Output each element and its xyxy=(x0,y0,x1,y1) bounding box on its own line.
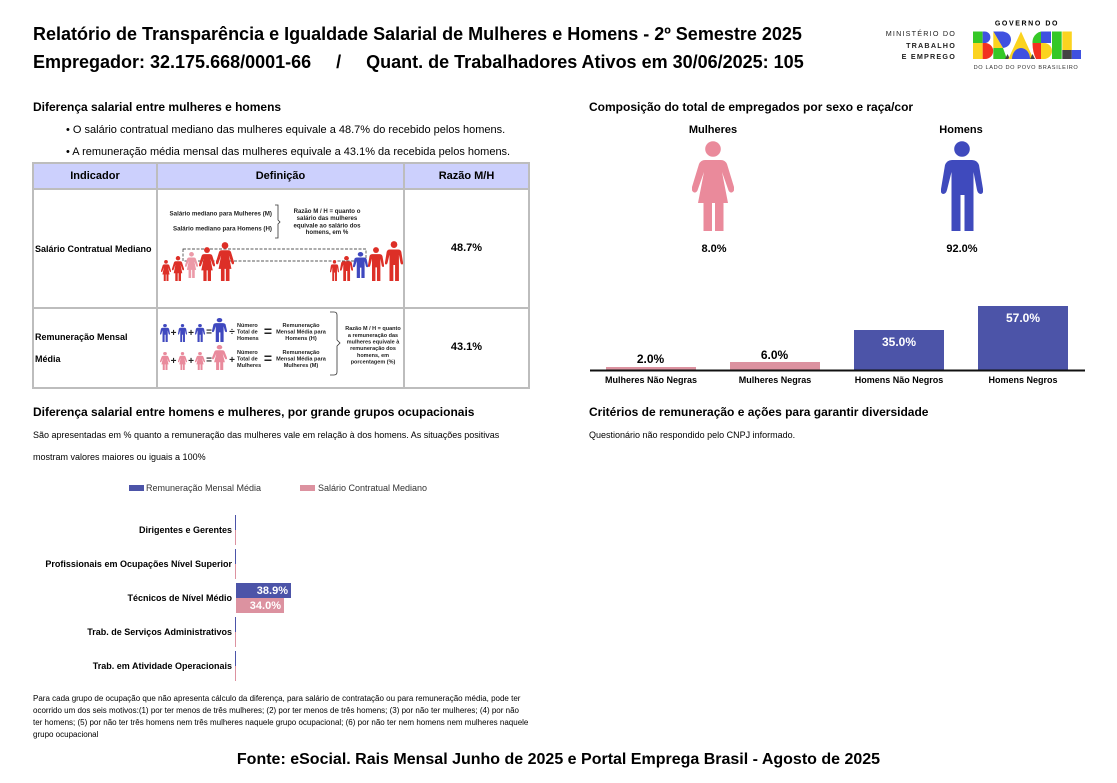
definition diagram: remuneração média xyxy=(160,312,401,376)
bar chart: raça/cor: Homens Negros xyxy=(988,375,1058,385)
definition diagram: remuneração média: + xyxy=(229,355,235,366)
definition diagram: remuneração média: Número xyxy=(237,350,258,356)
definition diagram: remuneração média: Total de xyxy=(237,356,258,362)
bar: 34.0% xyxy=(236,598,284,613)
label: Serviços Administrativos: Trab. de Serviços Administrativos xyxy=(87,627,232,637)
row label: Salário Contratual Mediano: Salário Contratual Mediano xyxy=(35,244,152,254)
definition diagram: remuneração média: Mensal Média para xyxy=(276,330,327,336)
definition diagram: remuneração média: + xyxy=(171,356,177,367)
logo: Ministério do Trabalho e Emprego: TRABALHO xyxy=(906,40,956,50)
definition diagram: salário mediano: Salário mediano para Mulheres (M) xyxy=(170,210,272,218)
definition diagram: salário mediano: salário das mulheres xyxy=(297,215,358,222)
row label: Remuneração Mensal Média: Média xyxy=(35,354,61,364)
label: Profissionais: Profissionais em Ocupações Nível Superior xyxy=(45,559,232,569)
definition diagram: remuneração média: = xyxy=(264,323,272,339)
text: bullet points xyxy=(66,124,510,158)
definition diagram: remuneração média: + xyxy=(188,356,194,367)
value: 8.0%: 8.0% xyxy=(701,243,727,255)
label: Técnicos: Técnicos de Nível Médio xyxy=(127,593,232,603)
logo: Ministério do Trabalho e Emprego: E EMPREGO xyxy=(902,52,956,61)
definition diagram: remuneração média: Homens (H) xyxy=(285,336,317,342)
logo: Governo do Brasil: GOVERNO DO xyxy=(995,20,1059,28)
text: bullet points: • A remuneração média mensal das mulheres equivale a 43.1% da recebida pelos homens. xyxy=(66,146,510,158)
definition diagram: remuneração média: = xyxy=(264,350,272,366)
heading: critérios: Critérios de remuneração e ações para garantir diversidade xyxy=(589,405,928,419)
icon: man xyxy=(941,141,983,231)
bar chart: raça/cor: 6.0% xyxy=(761,348,789,362)
definition diagram: remuneração média: Remuneração xyxy=(282,350,320,356)
legend: Salário Contratual Mediano: Salário Contratual Mediano xyxy=(318,483,427,493)
bar: 38.9% xyxy=(236,583,291,598)
chart: grupos ocupacionais xyxy=(235,515,291,681)
definition diagram: remuneração média: ÷ xyxy=(229,327,235,338)
text: nota: grupo ocupacional xyxy=(33,730,98,739)
bar chart: raça/cor: Mulheres Não Negras xyxy=(605,375,697,385)
table borders xyxy=(32,162,530,389)
heading: grupos ocupacionais: Diferença salarial entre homens e mulheres, por grande grupos ocupacionais xyxy=(33,405,474,419)
definition diagram: remuneração média: remuneração dos xyxy=(350,346,396,352)
definition diagram: remuneração média: Mensal Média para xyxy=(276,356,327,362)
text: explicação: mostram valores maiores ou iguais a 100% xyxy=(33,452,206,462)
table header background xyxy=(33,163,529,189)
definition diagram: salário mediano: Razão M / H = quanto o xyxy=(294,208,361,215)
bar chart: raça/cor: 57.0% xyxy=(1006,311,1040,325)
row label: Remuneração Mensal Média: Remuneração Mensal xyxy=(35,332,128,342)
legend: Remuneração Mensal Média: Remuneração Mensal Média xyxy=(146,483,261,493)
heading: diferença salarial: Diferença salarial entre mulheres e homens xyxy=(33,100,281,114)
text: explicação: São apresentadas em % quanto a remuneração das mulheres vale em relação à dos homens. As situações positivas xyxy=(33,430,499,440)
text: bullet points: • O salário contratual mediano das mulheres equivale a 48.7% do recebido pelos homens. xyxy=(66,124,505,136)
logo: Governo do Brasil xyxy=(973,20,1081,71)
title xyxy=(33,24,804,72)
logo: Ministério do Trabalho e Emprego xyxy=(886,29,956,61)
definition diagram: remuneração média: = xyxy=(206,327,212,338)
value: 43.1%: 43.1% xyxy=(451,341,482,353)
text: nota: ter homens; (5) por não ter três homens nem três mulheres naquele grupo ocupacional; (6) por não ter nem homens nem mulheres naquele xyxy=(33,718,528,727)
definition diagram: remuneração média: porcentagem (%) xyxy=(351,360,395,366)
label: Dirigentes e Gerentes: Dirigentes e Gerentes xyxy=(139,525,232,535)
label: Mulheres: Mulheres xyxy=(689,124,737,136)
bar chart: raça/cor: 2.0% xyxy=(637,352,665,366)
definition diagram: remuneração média: Remuneração xyxy=(282,323,320,329)
title: Empregador: 32.175.668/0001-66 / Quant. de Trabalhadores Ativos em 30/06/2025: 105 xyxy=(33,52,804,72)
value: 92.0%: 92.0% xyxy=(946,243,978,255)
definition diagram: remuneração média: Mulheres (M) xyxy=(284,363,318,369)
definition diagram: remuneração média: = xyxy=(206,355,212,366)
header: Definição: Definição xyxy=(256,170,305,182)
text: nota xyxy=(33,694,528,739)
definition diagram: remuneração média: Total de xyxy=(237,330,258,336)
bar chart: raça/cor: 35.0% xyxy=(882,335,916,349)
definition diagram: remuneração média: + xyxy=(171,328,177,339)
footer: fonte: Fonte: eSocial. Rais Mensal Junho de 2025 e Portal Emprega Brasil - Agosto de 2025 xyxy=(237,751,880,768)
table: indicators xyxy=(32,162,530,389)
definition diagram: remuneração média: mulheres equivale à xyxy=(347,340,400,346)
definition diagram: remuneração média: Mulheres xyxy=(237,363,261,369)
title: Relatório de Transparência e Igualdade Salarial de Mulheres e Homens - 2º Semestre 2025 xyxy=(33,24,802,44)
legend xyxy=(129,483,427,493)
text: explicação xyxy=(33,430,499,462)
logo: Governo do Brasil: DO LADO DO POVO BRASILEIRO xyxy=(974,65,1078,71)
bar chart: raça/cor: Homens Não Negros xyxy=(855,375,943,385)
row label: Remuneração Mensal Média xyxy=(35,332,128,364)
definition diagram: remuneração média: a remuneração das xyxy=(348,333,398,339)
bar: 34.0%: 34.0% xyxy=(250,600,281,612)
logo: Ministério do Trabalho e Emprego: MINISTÉRIO DO xyxy=(886,29,956,38)
heading: composição: Composição do total de empregados por sexo e raça/cor xyxy=(589,100,913,114)
text: nota: ocorrido um dos seis motivos:(1) por ter menos de três mulheres; (2) por ter menos de três homens; (3) por não ter mulheres; (4) por não xyxy=(33,706,519,715)
icon: woman xyxy=(692,141,734,231)
definition diagram: salário mediano: homens, em % xyxy=(306,229,349,236)
definition diagram: remuneração média: + xyxy=(188,328,194,339)
definition diagram: remuneração média: homens, em xyxy=(357,353,389,359)
bar chart: raça/cor xyxy=(590,306,1085,385)
header: Indicador: Indicador xyxy=(70,170,120,182)
axis: Dirigentes xyxy=(235,515,236,530)
definition diagram: salário mediano: Salário mediano para Homens (H) xyxy=(173,226,272,232)
bar: 38.9%: 38.9% xyxy=(257,585,288,597)
definition diagram: remuneração média: Número xyxy=(237,323,258,329)
label: Homens: Homens xyxy=(939,124,983,136)
definition diagram: remuneração média: Razão M / H = quanto xyxy=(345,326,401,332)
definition diagram: remuneração média: Homens xyxy=(237,336,259,342)
header: Razão M/H: Razão M/H xyxy=(439,170,494,182)
text: nota: Para cada grupo de ocupação que não apresenta cálculo da diferença, para salário de contratação ou para remuneração média, pode ter xyxy=(33,694,520,703)
text: questionário: Questionário não respondido pelo CNPJ informado. xyxy=(589,430,795,440)
bar chart: raça/cor: Mulheres Negras xyxy=(739,375,811,385)
value: 48.7%: 48.7% xyxy=(451,242,482,254)
definition diagram: salário mediano: equivale ao salário dos xyxy=(293,222,361,230)
label: Atividade Operacionais: Trab. em Atividade Operacionais xyxy=(93,661,232,671)
definition diagram: salário mediano xyxy=(161,204,403,281)
